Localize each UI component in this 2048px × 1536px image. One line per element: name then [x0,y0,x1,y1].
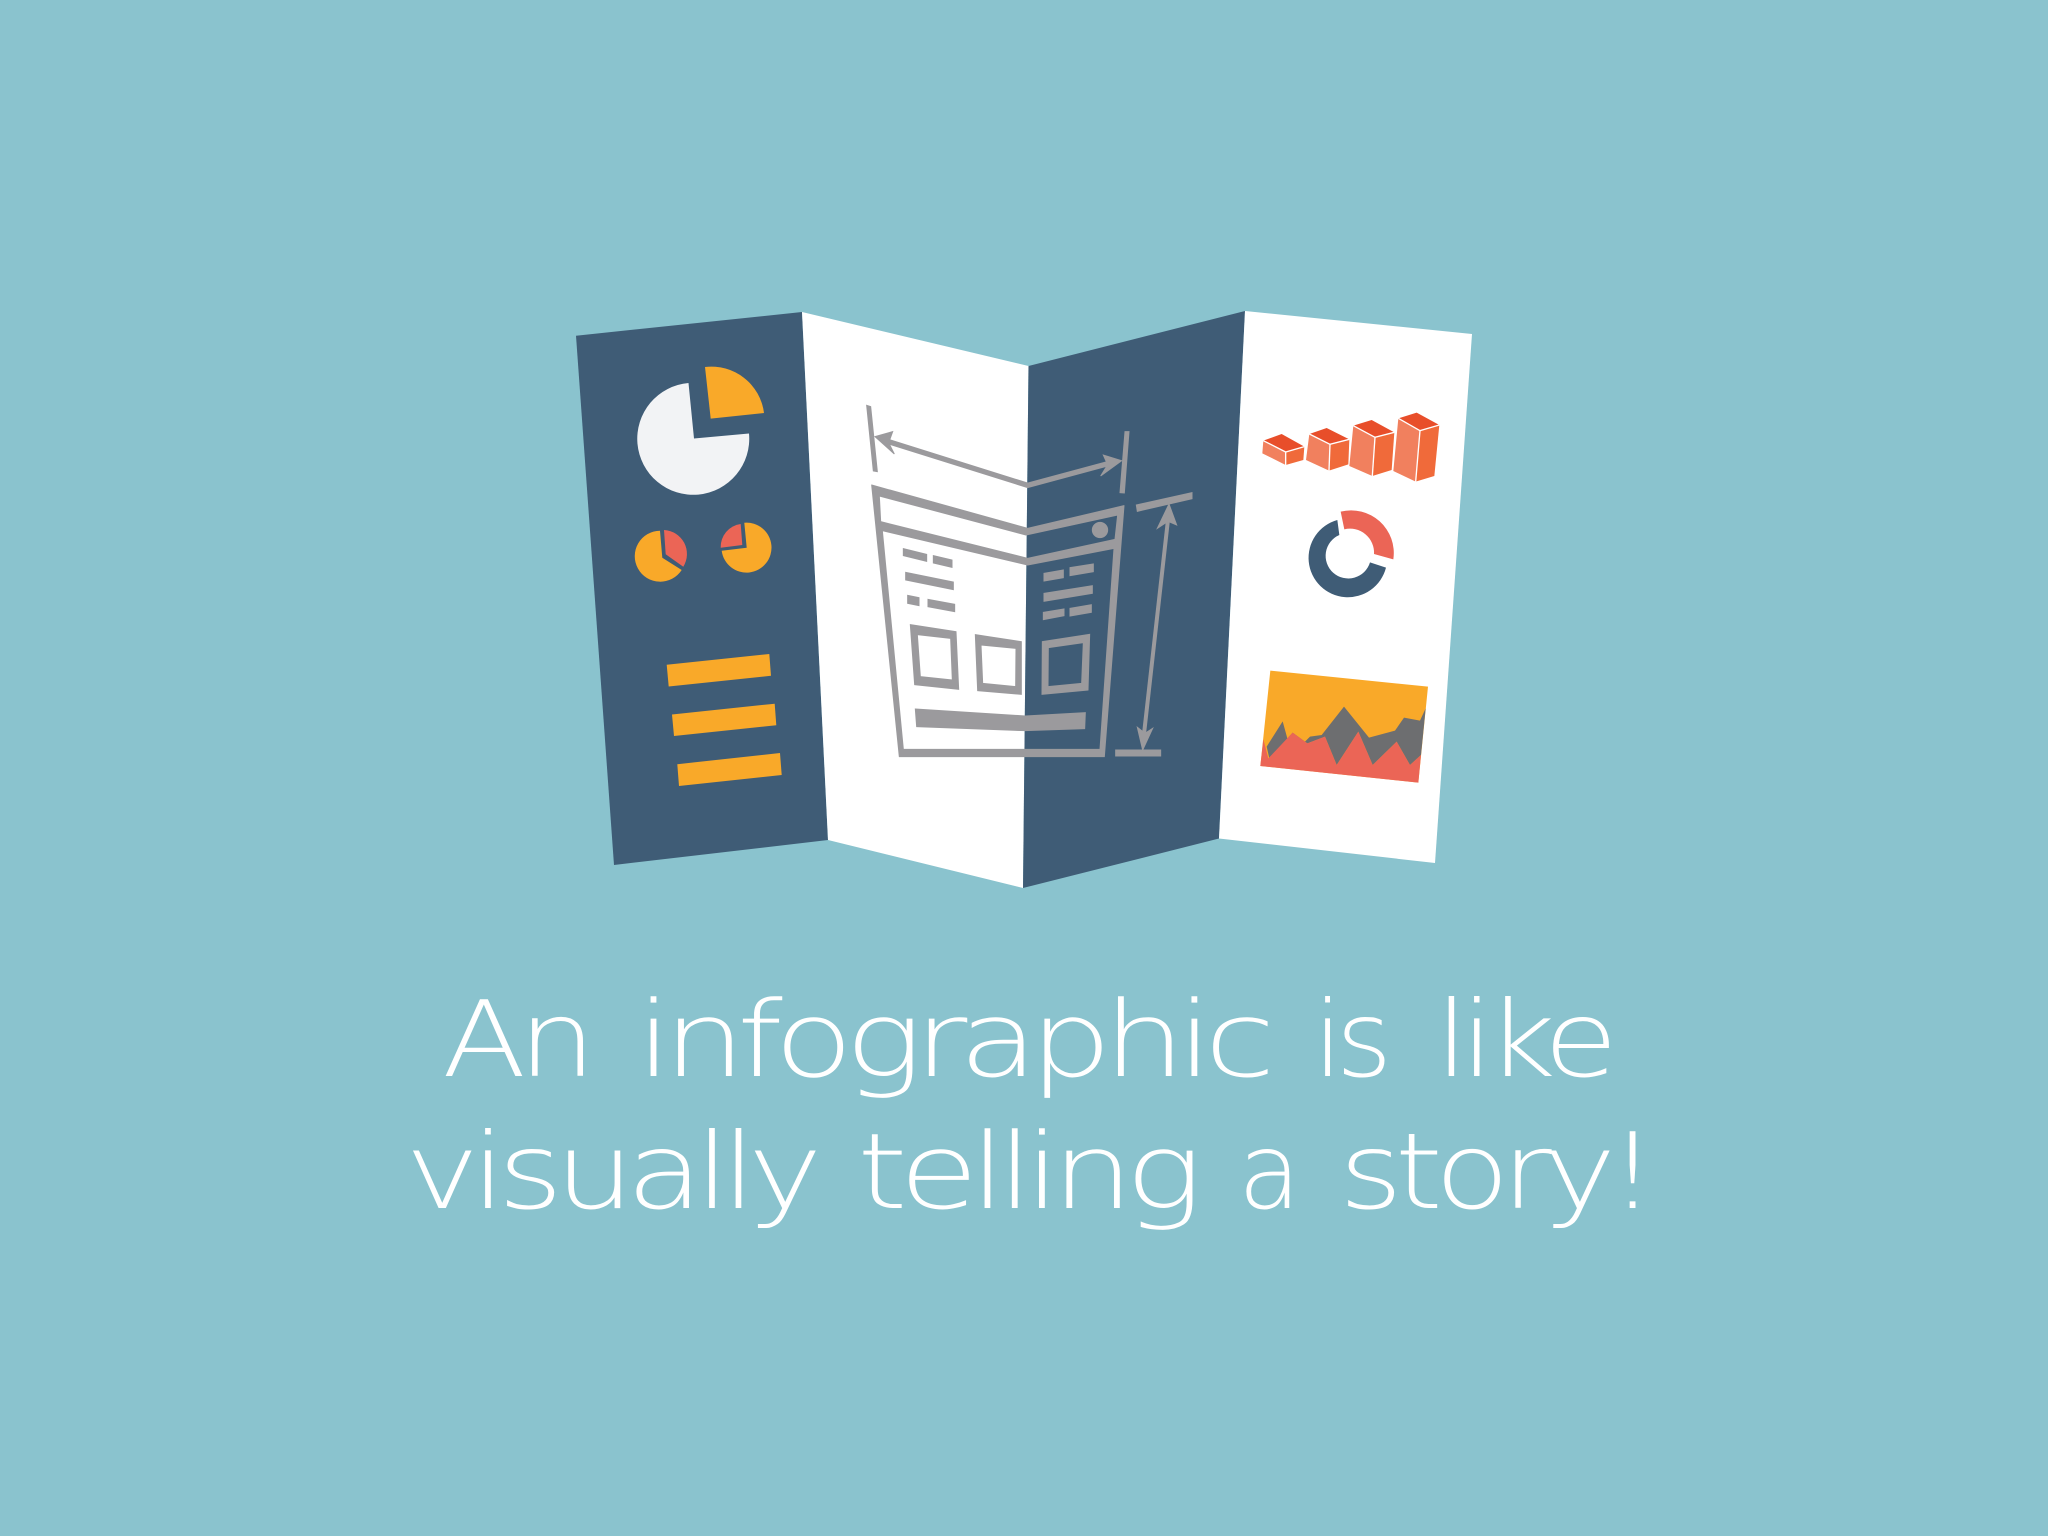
folded brochure illustration [576,311,1472,888]
area chart [1260,671,1428,783]
big pie chart [637,367,764,495]
title: a [1238,1111,1294,1233]
title: infographic [636,979,1269,1101]
3D bar chart [1262,413,1439,482]
text lines [903,549,1093,620]
small pie chart left [635,530,687,582]
panel: centre-left white fold [802,312,1028,888]
page outline [872,485,1124,757]
small pie chart right [721,523,772,573]
footer bar [915,709,1085,731]
panel: left dark fold [576,312,828,865]
panel: centre-right dark fold [1023,311,1245,888]
pie charts [635,367,772,582]
donut chart [1309,510,1394,597]
image boxes [910,625,1090,694]
title: is [1313,979,1385,1101]
title: visually [405,1111,816,1233]
title: telling [857,1111,1194,1233]
panel: right white fold [1219,311,1472,863]
height dimension arrow [1116,493,1192,756]
width dimension arrow [867,405,1129,493]
title: An [442,979,588,1101]
title [405,979,1649,1233]
page header dot [1092,522,1108,538]
right panel charts [1260,413,1439,783]
wireframe blueprint [867,405,1192,757]
title: story! [1339,1111,1649,1233]
title: like [1435,979,1610,1101]
orange text bars [667,654,782,786]
